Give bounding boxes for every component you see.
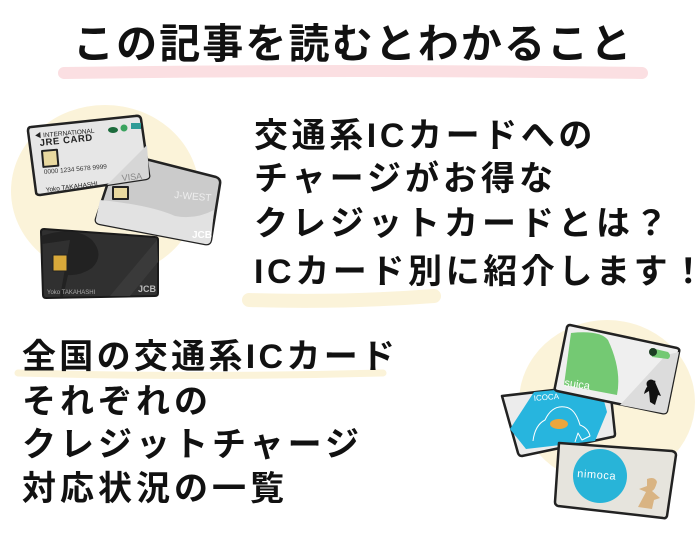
card: Suica (555, 325, 679, 413)
card: J-West: JCB (192, 230, 212, 241)
card: JRE CARD: Yoko TAKAHASHI (45, 181, 98, 194)
background blob (11, 105, 199, 277)
card: JRE CARD (28, 116, 149, 195)
card: J-West: J-WEST (174, 190, 212, 204)
card: ICOCA: ICOCA (533, 392, 560, 403)
text block: upper description: チャージがお得な (254, 160, 557, 198)
text block: upper description: クレジットカードとは？ (254, 205, 672, 243)
card: black P card (41, 229, 158, 298)
text block: lower description: 全国の交通系ICカード (22, 338, 398, 376)
icon: credit cards (11, 105, 220, 298)
text block: upper description (254, 117, 700, 291)
background blob (519, 320, 695, 484)
text block: lower description: 対応状況の一覧 (22, 470, 288, 508)
text block: lower description: クレジットチャージ (22, 426, 363, 464)
card: JRE CARD: VISA (121, 171, 143, 183)
icon: flying squirrel (638, 478, 660, 509)
text block: upper description: 交通系ICカードへの (254, 117, 596, 155)
text block: lower description (22, 338, 398, 508)
title: この記事を読むとわかること (73, 21, 633, 67)
card: JRE CARD: 0000 1234 5678 9999 (44, 163, 108, 176)
card: JRE CARD: JRE CARD (39, 132, 93, 149)
card: black P card: JCB (138, 284, 157, 294)
card: Suica: suica (564, 377, 592, 393)
card: ICOCA (502, 384, 615, 456)
card: black P card: Yoko TAKAHASHI (47, 290, 96, 296)
text block: upper description: ICカード別に紹介します！ (254, 253, 700, 291)
icon: transit IC cards (502, 320, 695, 518)
card: JRE CARD: ◀ INTERNATIONAL (34, 127, 95, 140)
title underline (64, 71, 642, 73)
card: J-West (96, 152, 220, 244)
highlight under nationwide line (18, 373, 383, 376)
highlight under IC card line (249, 296, 434, 301)
card: nimoca: nimoca (577, 468, 617, 483)
text block: lower description: それぞれの (22, 383, 212, 421)
icon: penguin (644, 379, 661, 405)
card: nimoca (555, 443, 676, 518)
